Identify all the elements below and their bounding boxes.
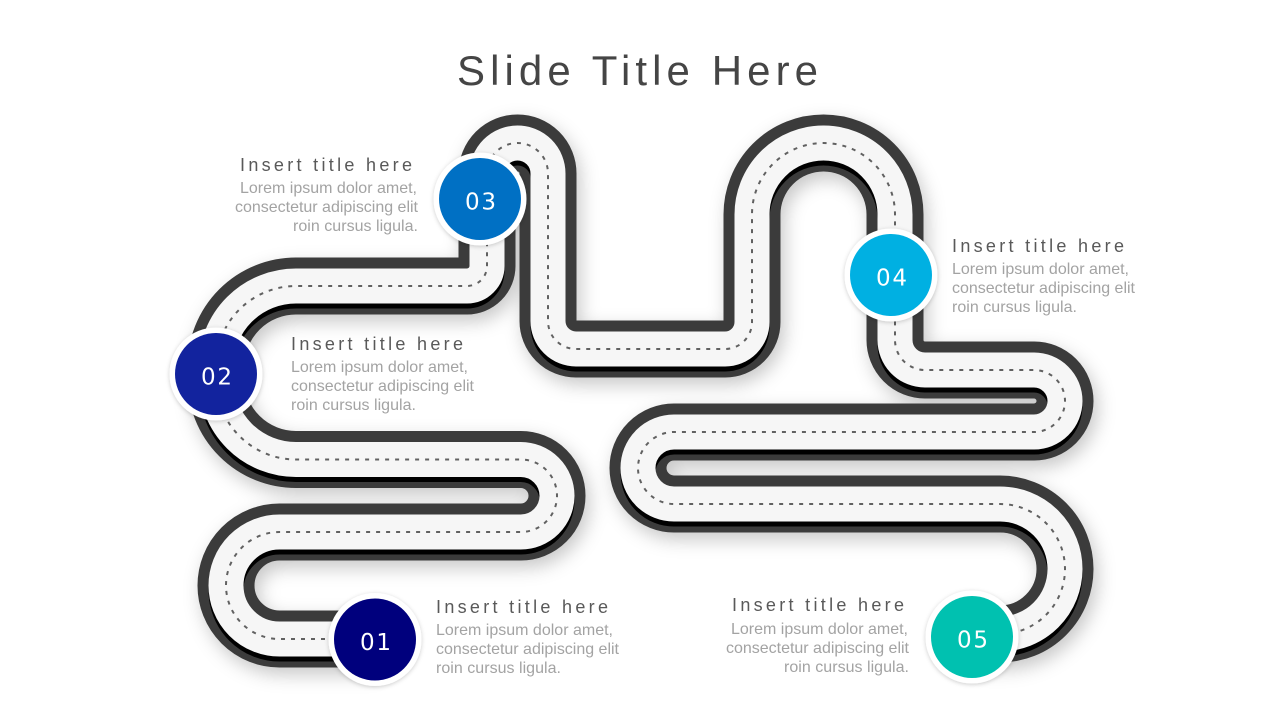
step 04 text: Insert title here	[952, 236, 1124, 256]
step 02 text: Lorem ipsum dolor amet,	[291, 359, 468, 376]
step 05 marker	[926, 590, 1018, 684]
step 02 marker: 02	[201, 364, 232, 390]
step 03 marker: 03	[465, 190, 496, 216]
step 03 text: Lorem ipsum dolor amet,	[240, 180, 417, 197]
step 05 text: Insert title here	[732, 595, 904, 615]
step 01 marker: 01	[360, 630, 391, 656]
step 02 marker	[170, 328, 262, 420]
step 02 text: consectetur adipiscing elit	[291, 378, 475, 395]
step 02 text	[291, 334, 475, 414]
step 04 text: consectetur adipiscing elit	[952, 280, 1136, 297]
step 05 text: consectetur adipiscing elit	[726, 640, 910, 657]
step 04 marker	[844, 228, 938, 322]
step 02 text: roin cursus ligula.	[291, 397, 416, 414]
step 05 text: roin cursus ligula.	[784, 659, 909, 676]
step 05 marker: 05	[957, 628, 988, 654]
step 04 marker: 04	[876, 266, 907, 292]
winding road	[216, 143, 1065, 644]
step 04 text: Lorem ipsum dolor amet,	[952, 261, 1129, 278]
step 05 text: Lorem ipsum dolor amet,	[731, 621, 908, 638]
step 05 text	[726, 595, 910, 676]
step 03 marker	[434, 152, 526, 246]
step 01 text: Insert title here	[436, 597, 608, 617]
step 01 text	[436, 597, 620, 677]
step 02 text: Insert title here	[291, 334, 463, 354]
step 03 text: consectetur adipiscing elit	[235, 199, 419, 216]
step 01 text: consectetur adipiscing elit	[436, 641, 620, 658]
step 03 text: Insert title here	[240, 155, 412, 175]
step 01 text: roin cursus ligula.	[436, 660, 561, 677]
step 04 text: roin cursus ligula.	[952, 299, 1077, 316]
step 01 text: Lorem ipsum dolor amet,	[436, 622, 613, 639]
step 01 marker	[328, 593, 422, 686]
step 03 text	[235, 155, 419, 235]
title: Slide Title Here	[457, 47, 818, 94]
step 03 text: roin cursus ligula.	[293, 218, 418, 235]
step 04 text	[952, 236, 1136, 316]
